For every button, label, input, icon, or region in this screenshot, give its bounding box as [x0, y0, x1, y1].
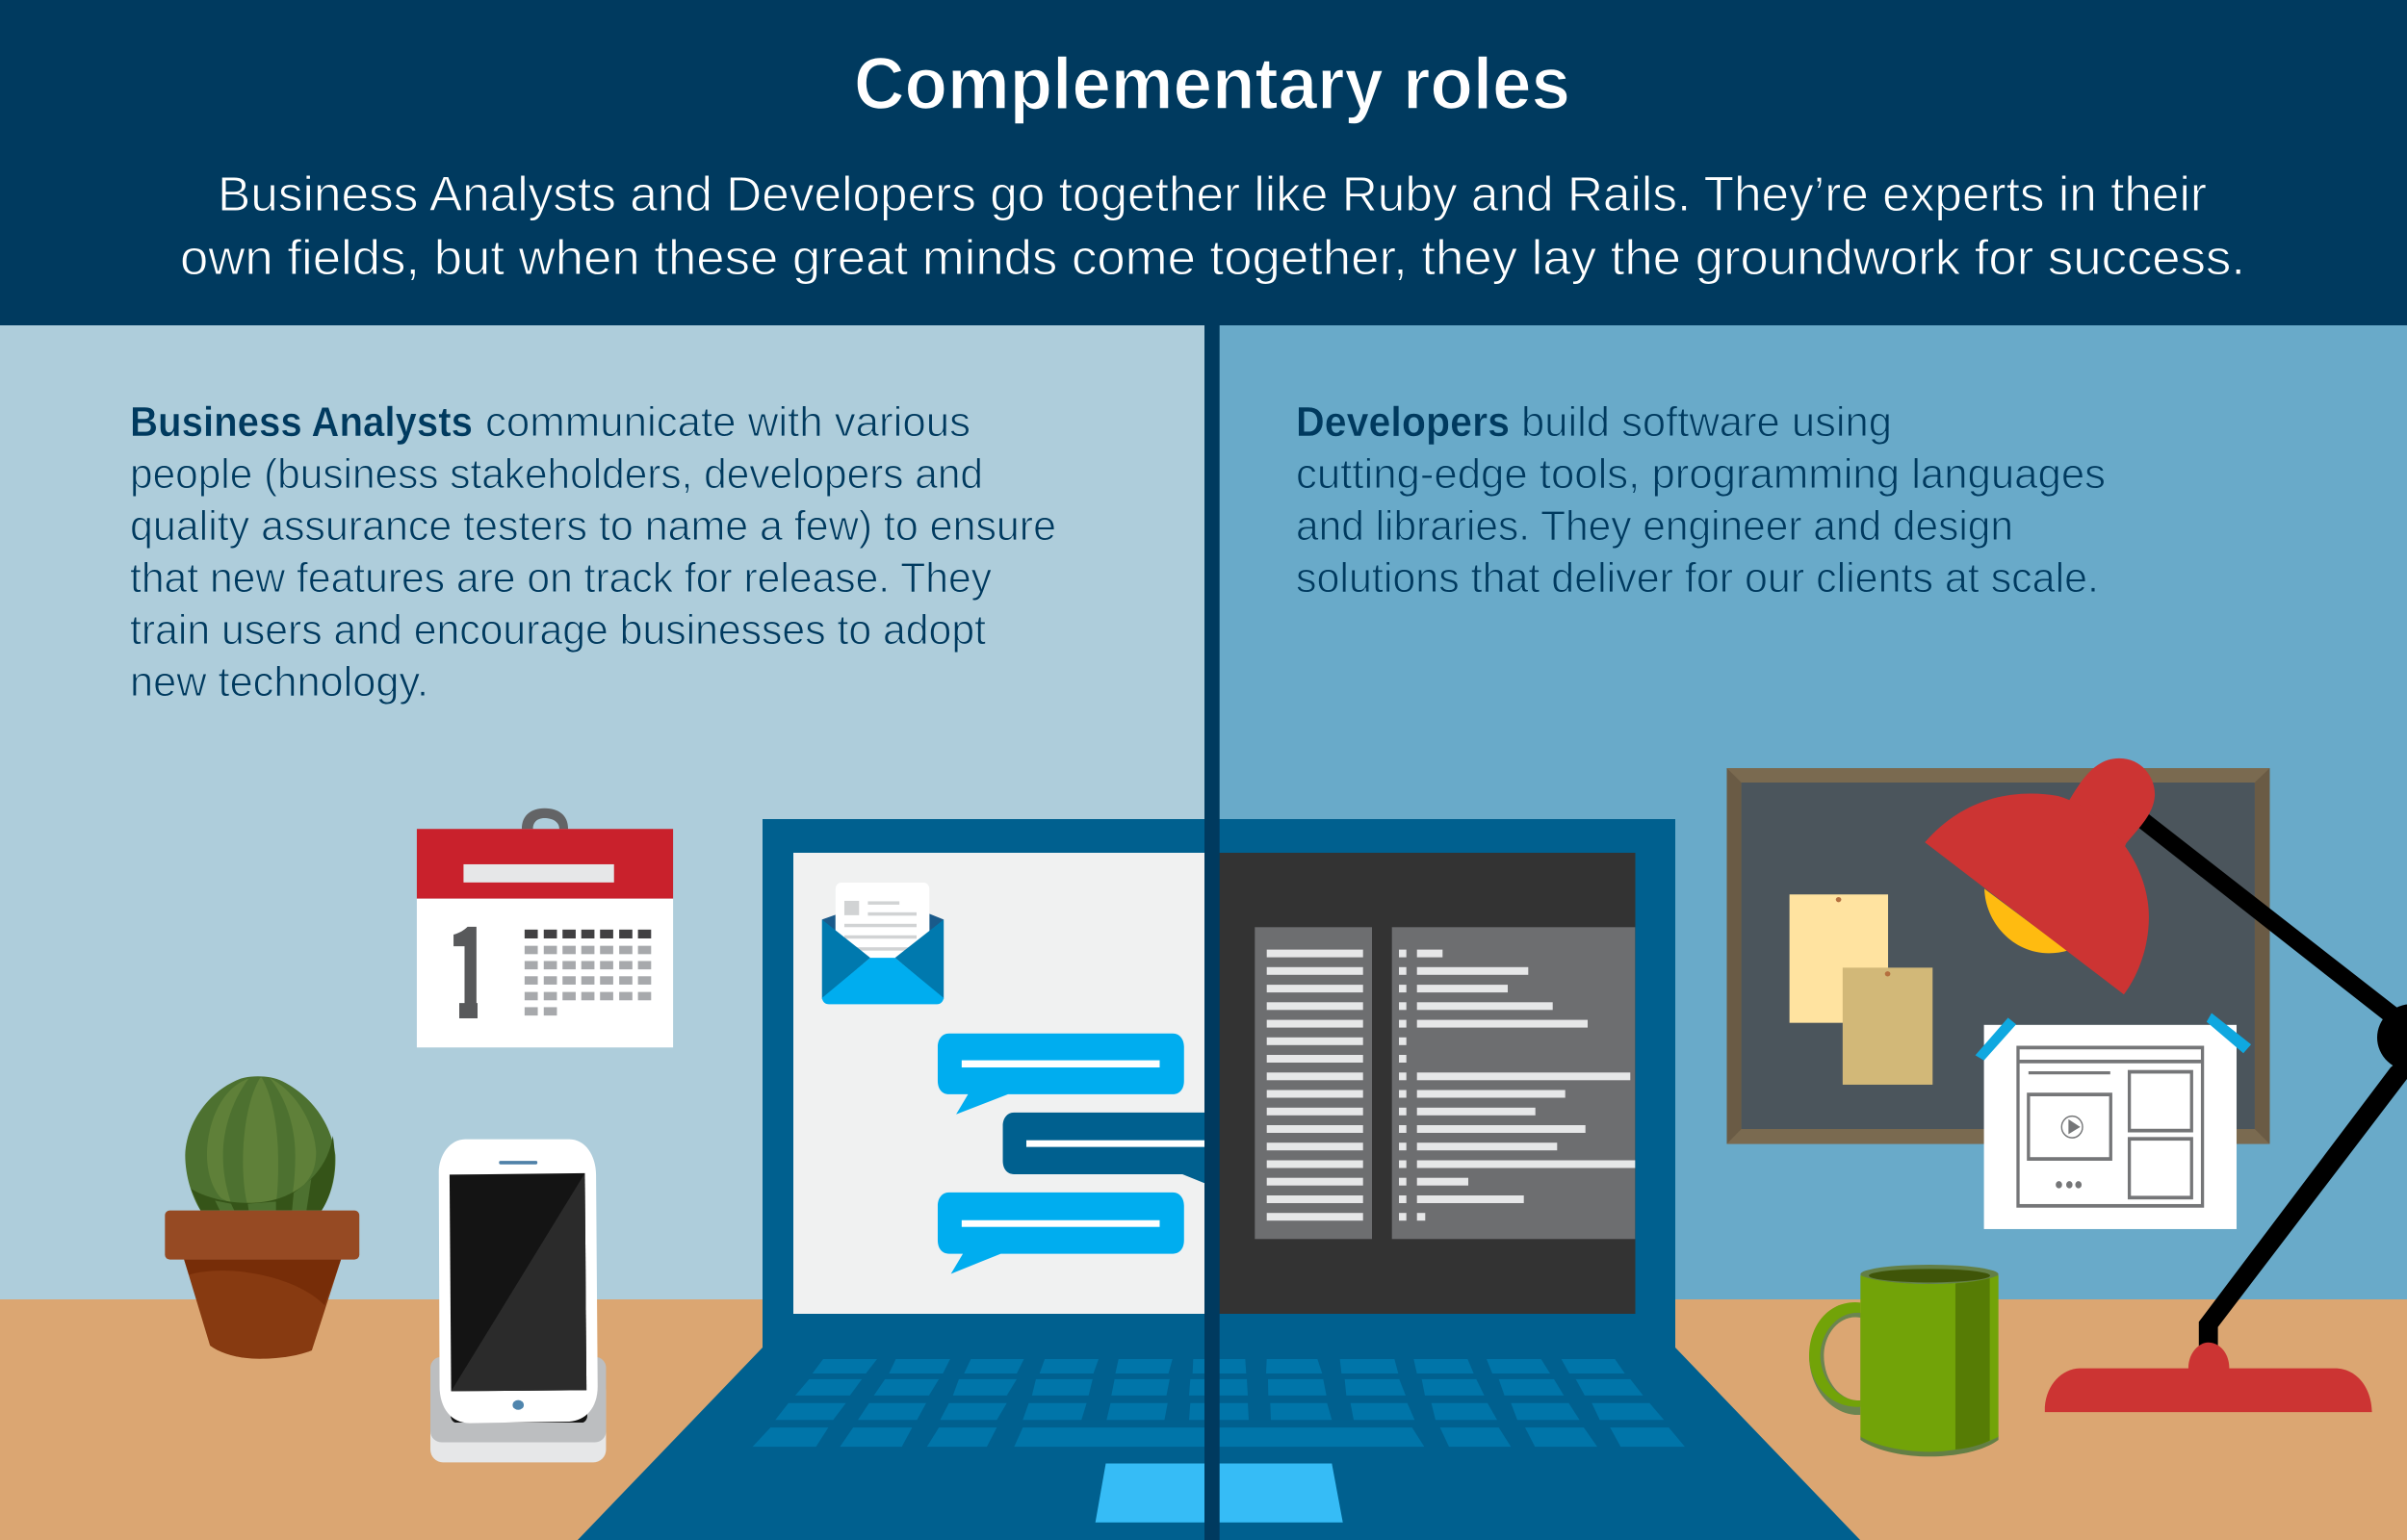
- text block: business analysts description: communicate with various: [485, 398, 971, 446]
- chat bubble 3: [938, 1193, 1184, 1273]
- laptop screen: analyst side: [793, 853, 1208, 1314]
- chat bubble 2: [1003, 1113, 1208, 1185]
- text block: business analysts description: new technology.: [130, 658, 428, 706]
- icon: smartphone on dock: [430, 1140, 606, 1462]
- text block: developers description: build software using: [1521, 398, 1892, 446]
- laptop screen: developer side code editor: [1205, 853, 1635, 1314]
- icon: desk lamp: [1925, 758, 2407, 1412]
- panel: business analysts background: [0, 325, 1213, 1540]
- text block: business analysts description: people (business stakeholders, developers and: [130, 450, 983, 498]
- wireframe sketch paper: [1976, 1013, 2251, 1229]
- text block: business analysts description: that new features are on track for release. They: [130, 554, 992, 602]
- intro text: Business Analysts and Developers go together like Ruby and Rails. They’re experts in their: [218, 167, 2207, 221]
- chat bubble 1: [938, 1034, 1184, 1115]
- icon: coffee mug: [1809, 1265, 1999, 1456]
- text block: developers description: cutting-edge tools, programming languages: [1296, 450, 2106, 498]
- text block: business analysts description: quality assurance testers to name a few) to ensure: [130, 502, 1056, 550]
- text block: developers description: [1296, 398, 2106, 602]
- panel: developers background: [1213, 325, 2407, 1540]
- sticky notes: [1790, 894, 1932, 1085]
- intro text: own fields, but when these great minds come together, they lay the groundwork for success.: [180, 230, 2245, 285]
- icon: wall calendar: [417, 808, 673, 1047]
- code panel: [1392, 927, 1635, 1239]
- text block: business analysts description: train users and encourage businesses to adopt: [130, 606, 986, 654]
- text block: business analysts description: Business Analysts: [130, 398, 473, 446]
- text block: developers description: solutions that deliver for our clients at scale.: [1296, 554, 2099, 602]
- intro text: [180, 167, 2245, 285]
- calendar date numeral: 1: [445, 872, 493, 1056]
- text block: developers description: and libraries. They engineer and design: [1296, 502, 2013, 550]
- laptop body: [578, 819, 1860, 1540]
- icon: cork board with notes: [1727, 768, 2269, 1229]
- desk surface: [0, 1299, 2407, 1540]
- text block: business analysts description: [130, 398, 1056, 706]
- laptop keyboard: [753, 1359, 1685, 1447]
- title: Complementary roles: [854, 43, 1570, 125]
- laptop trackpad: [1096, 1463, 1343, 1523]
- icon: potted cactus: [165, 1076, 359, 1359]
- header band: [0, 0, 2407, 325]
- text block: developers description: Developers: [1296, 398, 1510, 446]
- icon: email envelope: [822, 883, 944, 1004]
- file tree panel: [1255, 927, 1372, 1239]
- center divider: [1204, 325, 1220, 1540]
